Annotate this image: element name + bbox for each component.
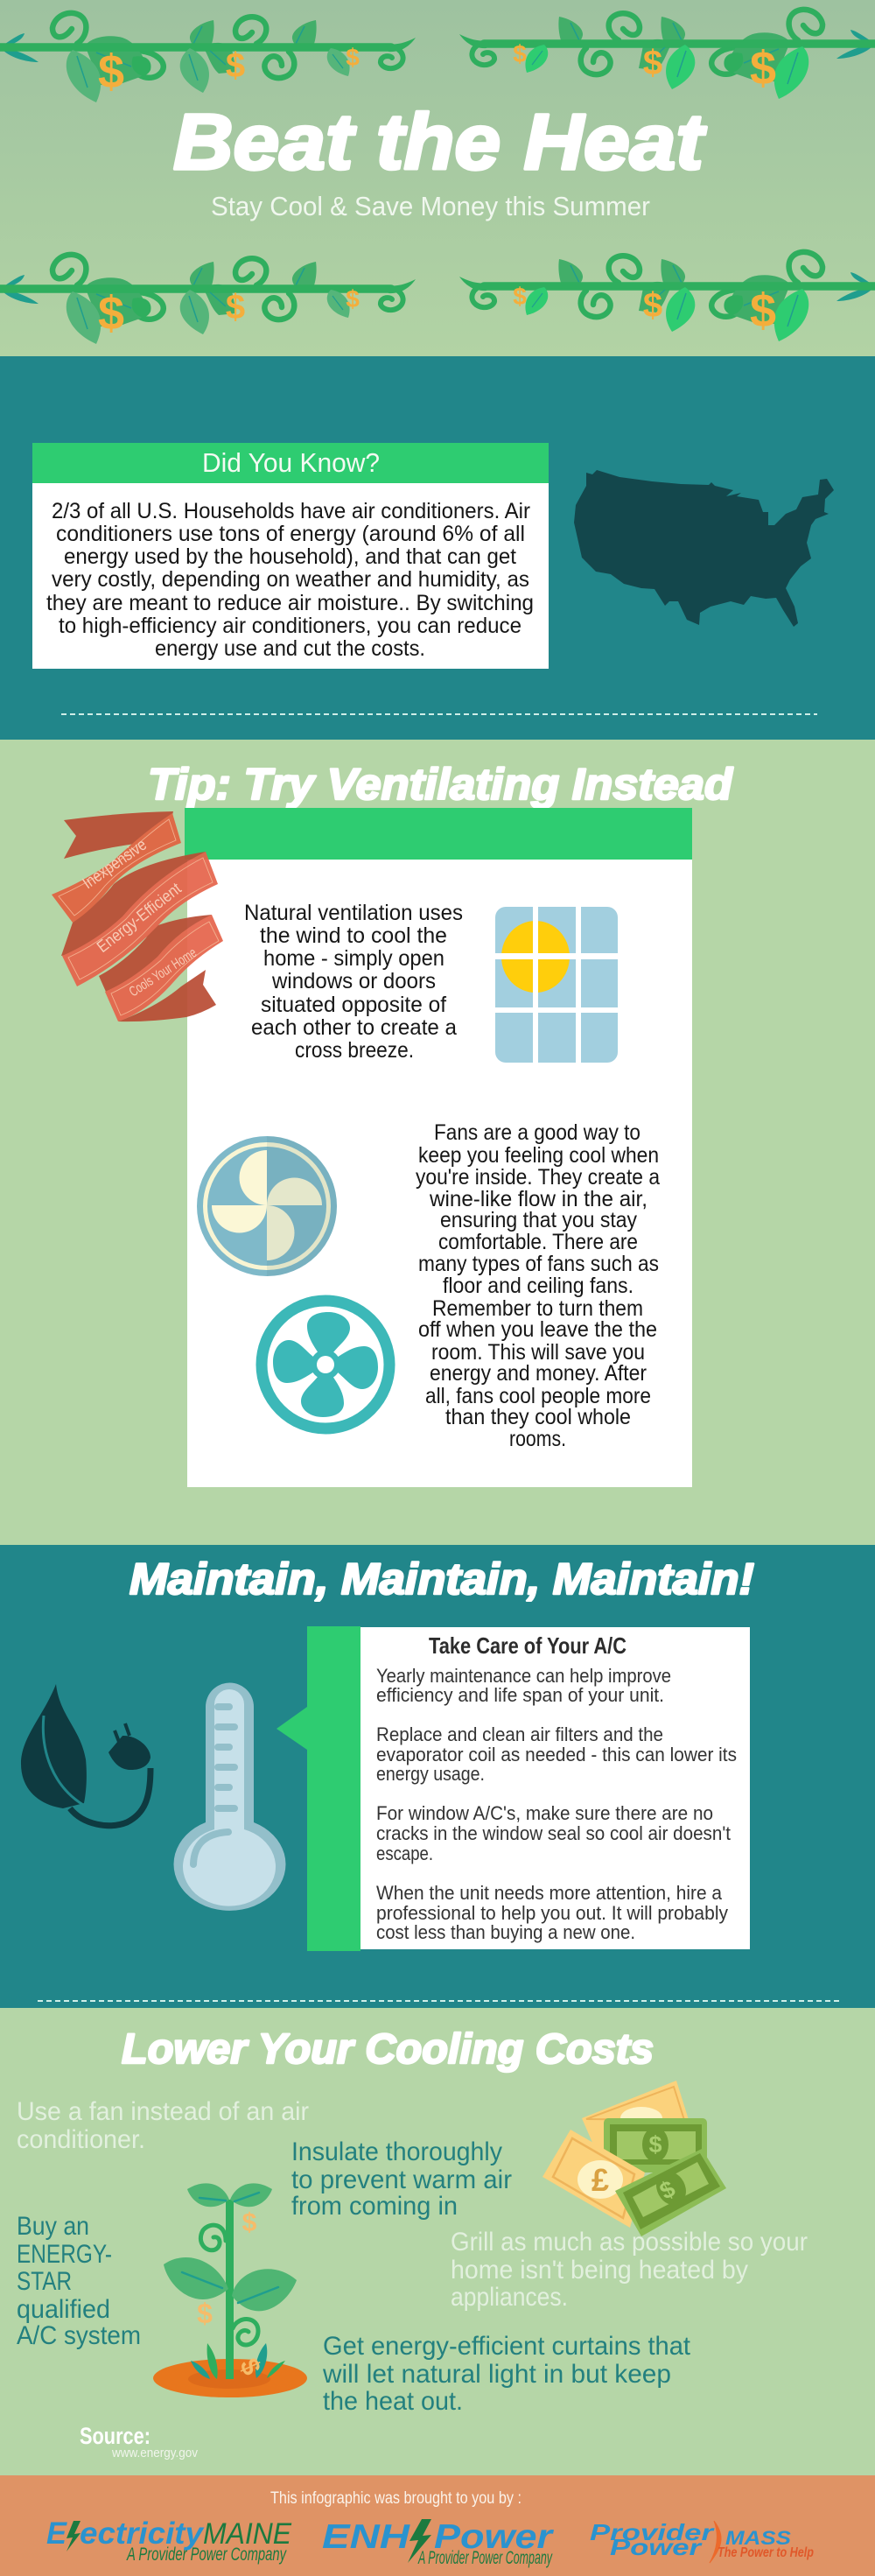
logo: ENH Power: Power bbox=[434, 2518, 554, 2556]
text block: maintenance tips: cost less than buying a new one. bbox=[376, 1921, 635, 1943]
logo: ENH Power bbox=[322, 2518, 554, 2568]
text block: curtains: the heat out. bbox=[323, 2387, 463, 2416]
panel: take care of your A/C bbox=[276, 1626, 750, 1951]
heading: lower your cooling costs: Lower Your Cooling Costs bbox=[122, 2026, 654, 2073]
text block: fans: energy and money. After bbox=[430, 1361, 647, 1386]
text block: natural ventilation: home - simply open bbox=[263, 946, 444, 971]
vine: top left bbox=[0, 13, 416, 102]
text block: maintenance tips: For window A/C's, make sure there are no bbox=[376, 1802, 713, 1824]
text block: air conditioner facts: conditioners use tons of energy (around 6% of all bbox=[56, 522, 525, 546]
text block: insulate: to prevent warm air bbox=[291, 2165, 512, 2194]
text block: natural ventilation: cross breeze. bbox=[295, 1038, 414, 1063]
logo: Provider Power MASS: MASS bbox=[725, 2527, 791, 2549]
vine: lower right: $ bbox=[513, 283, 527, 310]
text block: natural ventilation: Natural ventilation uses bbox=[244, 901, 463, 925]
text block: maintenance tips: Replace and clean air filters and the bbox=[376, 1723, 663, 1745]
heading: tip: Tip: Try Ventilating Instead bbox=[148, 760, 734, 809]
text block: natural ventilation: each other to create a bbox=[251, 1015, 457, 1040]
text block: air conditioner facts: very costly, depending on weather and humidity, as bbox=[52, 567, 529, 592]
vine: lower right: $ bbox=[750, 284, 776, 337]
logo: ElectricityMAINE bbox=[46, 2516, 291, 2565]
text block: fans: floor and ceiling fans. bbox=[443, 1274, 634, 1298]
logo: Provider Power MASS: Power bbox=[610, 2534, 704, 2560]
vine: top right: $ bbox=[643, 44, 662, 82]
text block: fans: than they cool whole bbox=[445, 1405, 631, 1429]
text block: curtains: will let natural light in but keep bbox=[322, 2360, 671, 2389]
vine: lower left bbox=[0, 255, 416, 344]
text block: grill bbox=[451, 2228, 808, 2312]
text block: curtains bbox=[322, 2332, 691, 2416]
ribbon label: energy-efficient: Energy-Efficient bbox=[94, 880, 186, 957]
section background: maintain bbox=[0, 1545, 875, 2008]
icon: money plant: $ bbox=[197, 2298, 213, 2329]
icon: money plant: $ bbox=[234, 2354, 266, 2380]
logo: ENH Power: ENH bbox=[322, 2518, 410, 2556]
text block: natural ventilation: windows or doors bbox=[271, 969, 436, 993]
text block: curtains: Get energy-efficient curtains that bbox=[323, 2332, 691, 2361]
text block: energy star: Buy an bbox=[17, 2212, 89, 2241]
text block: maintenance tips bbox=[376, 1665, 737, 1943]
vine: top right: $ bbox=[750, 42, 776, 95]
source bbox=[80, 2423, 198, 2460]
icon: money bills bbox=[542, 2081, 726, 2236]
text block: fans: comfortable. There are bbox=[438, 1230, 638, 1254]
text block: fans: you're inside. They create a bbox=[416, 1165, 660, 1190]
text block: air conditioner facts bbox=[46, 499, 534, 661]
vine: lower right bbox=[459, 252, 875, 341]
text block: fans: Fans are a good way to bbox=[434, 1120, 640, 1145]
vine: top left: $ bbox=[346, 44, 360, 71]
vine: lower left: $ bbox=[346, 285, 360, 312]
title: Beat the Heat bbox=[173, 99, 707, 186]
icon: money plant bbox=[153, 2183, 307, 2397]
text block: fans: ensuring that you stay bbox=[440, 1208, 637, 1232]
text block: insulate bbox=[291, 2137, 512, 2221]
map: united states bbox=[574, 470, 834, 627]
text block: natural ventilation bbox=[244, 901, 463, 1063]
header background bbox=[0, 0, 875, 356]
ribbon label: cools your home: Cools Your Home bbox=[127, 945, 200, 1000]
text block: energy star bbox=[17, 2212, 141, 2350]
logo: ENH Power: A Provider Power Company bbox=[417, 2548, 553, 2568]
logo: ElectricityMAINE: E bbox=[46, 2516, 68, 2551]
text block: fans: wine-like flow in the air, bbox=[429, 1187, 648, 1211]
text block: energy star: A/C system bbox=[17, 2321, 141, 2350]
text block: fans: keep you feeling cool when bbox=[418, 1143, 659, 1168]
icon: thermometer bbox=[173, 1682, 285, 1911]
text block: grill: appliances. bbox=[451, 2283, 568, 2312]
text block: maintenance tips: When the unit needs more attention, hire a bbox=[376, 1882, 723, 1904]
text block: maintenance tips: Yearly maintenance can help improve bbox=[376, 1665, 671, 1687]
text block: maintenance tips: cracks in the window seal so cool air doesn't bbox=[376, 1822, 731, 1844]
text block: energy star: qualified bbox=[17, 2295, 110, 2324]
section background: cooling costs bbox=[0, 2008, 875, 2475]
icon: ventilator fan bbox=[262, 1301, 389, 1428]
ribbon label: inexpensive: Inexpensive bbox=[80, 836, 150, 893]
ribbon: benefits bbox=[52, 811, 223, 1021]
text block: fans: all, fans cool people more bbox=[425, 1384, 651, 1408]
arrow: card pointer bbox=[276, 1707, 307, 1750]
text block: use a fan: conditioner. bbox=[17, 2125, 145, 2154]
text block: use a fan bbox=[17, 2097, 309, 2154]
text block: insulate: from coming in bbox=[291, 2192, 458, 2221]
text block: natural ventilation: situated opposite of bbox=[261, 993, 446, 1017]
heading: did you know: Did You Know? bbox=[202, 447, 380, 478]
icon: money bills: £ bbox=[592, 2162, 609, 2198]
text block: energy star: ENERGY- bbox=[17, 2240, 112, 2269]
heading: take care: Take Care of Your A/C bbox=[429, 1632, 626, 1659]
vine: top right bbox=[459, 10, 875, 99]
section background: footer bbox=[0, 2475, 875, 2576]
vine: top left: $ bbox=[226, 46, 245, 85]
section background: ventilation bbox=[0, 740, 875, 1545]
text block: insulate: Insulate thoroughly bbox=[291, 2137, 502, 2166]
text block: use a fan: Use a fan instead of an air bbox=[17, 2097, 309, 2126]
vine: top right: $ bbox=[513, 40, 527, 67]
text block: natural ventilation: the wind to cool the bbox=[260, 923, 447, 948]
text block: maintenance tips: energy usage. bbox=[376, 1763, 485, 1785]
text block: maintenance tips: escape. bbox=[376, 1843, 433, 1864]
text block: fans bbox=[416, 1120, 660, 1451]
vine: lower right: $ bbox=[643, 286, 662, 325]
panel: ventilation bbox=[185, 808, 692, 1487]
text block: air conditioner facts: 2/3 of all U.S. Households have air conditioners. Air bbox=[52, 499, 530, 523]
logo: ElectricityMAINE: MAINE bbox=[203, 2517, 291, 2551]
icon: money bills: $ bbox=[655, 2175, 679, 2205]
logo: ElectricityMAINE: ectricity bbox=[80, 2516, 205, 2551]
text block: air conditioner facts: energy use and cut the costs. bbox=[155, 636, 425, 661]
source: www.energy.gov bbox=[111, 2446, 198, 2460]
text block: maintenance tips: efficiency and life span of your unit. bbox=[376, 1684, 664, 1706]
icon: leaf and plug bbox=[21, 1684, 150, 1826]
vine: top left: $ bbox=[98, 46, 124, 98]
text block: grill: Grill as much as possible so your bbox=[451, 2228, 808, 2257]
panel: did you know bbox=[32, 443, 549, 669]
text block: energy star: STAR bbox=[17, 2267, 72, 2296]
vine: lower left: $ bbox=[98, 287, 124, 340]
icon: window with sun bbox=[495, 907, 618, 1063]
text block: maintenance tips: professional to help you out. It will probably bbox=[376, 1902, 728, 1924]
icon: pinwheel fan bbox=[197, 1136, 337, 1276]
icon: money bills: $ bbox=[648, 2131, 662, 2158]
icon: money plant: $ bbox=[242, 2208, 257, 2237]
text block: air conditioner facts: they are meant to reduce air moisture.. By switching bbox=[46, 591, 534, 615]
text block: fans: many types of fans such as bbox=[418, 1252, 659, 1276]
text block: maintenance tips: evaporator coil as needed - this can lower its bbox=[376, 1744, 737, 1765]
source: Source: bbox=[80, 2423, 150, 2449]
vine: lower left: $ bbox=[226, 288, 245, 326]
logo: Provider Power MASS: Provider bbox=[590, 2519, 715, 2545]
logo: ElectricityMAINE: A Provider Power Company bbox=[126, 2544, 287, 2565]
text block: fans: off when you leave the the bbox=[418, 1317, 657, 1342]
text block: air conditioner facts: energy used by the household), and that can get bbox=[64, 544, 516, 569]
logo: Provider Power MASS bbox=[590, 2519, 814, 2563]
subtitle: Stay Cool & Save Money this Summer bbox=[211, 191, 650, 221]
text block: fans: Remember to turn them bbox=[432, 1296, 643, 1321]
text block: fans: room. This will save you bbox=[431, 1340, 645, 1365]
text block: grill: home isn't being heated by bbox=[451, 2256, 748, 2285]
heading: maintain: Maintain, Maintain, Maintain! bbox=[130, 1555, 754, 1604]
footer credit: This infographic was brought to you by : bbox=[270, 2489, 522, 2508]
logo: Provider Power MASS: The Power to Help bbox=[718, 2545, 814, 2560]
text block: air conditioner facts: to high-efficiency air conditioners, you can reduce bbox=[59, 614, 522, 638]
section background: did you know bbox=[0, 356, 875, 740]
text block: fans: rooms. bbox=[509, 1427, 566, 1451]
